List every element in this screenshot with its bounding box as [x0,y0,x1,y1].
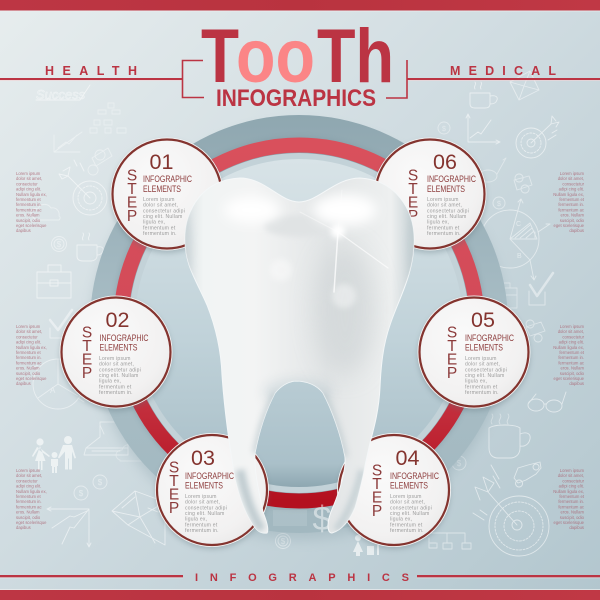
body text: fermentum et [427,225,460,231]
side text: left middle: eget scelerisque [16,376,47,381]
doodle: percent tag right [514,174,532,193]
side text: right middle: fermentum et [559,350,585,355]
vertical label: E [408,194,418,212]
step 04: INFOGRAPHIC [390,471,439,481]
vertical label: E [127,194,137,212]
doodle: cloud left [31,204,60,220]
side text: left bottom: eros. Nullam [16,510,40,515]
header rule right [407,78,600,81]
vertical label: T [82,338,92,355]
doodle: percent tag [88,148,112,175]
tooth [180,178,421,533]
step 02: 02 [106,308,129,332]
vertical label: S [372,462,382,480]
vertical label: E [447,352,457,368]
step 03: 03 [191,446,215,470]
side text: left bottom [16,468,47,530]
doodle: steam lines [491,414,509,424]
side text: right bottom: Lorem ipsum [560,468,585,473]
body text: fermentum et [465,384,498,390]
side text: left top: Nullam ligula ex, [16,192,47,197]
vertical label: T [372,476,382,493]
doodle: cup bottom right [489,425,530,458]
doodle: arrow chart right top [466,114,500,144]
body text: dolor sit amet, [99,362,134,368]
side text: right bottom: dapibus [569,525,584,530]
doodle: org chart right [429,533,471,549]
side text: left middle: adipi cing elit. [16,340,41,345]
title bracket [182,60,407,98]
doodle: small coin right top: $ [442,126,446,133]
step 02: INFOGRAPHIC [100,333,149,343]
side text: left bottom: dolor sit amet, [16,473,42,478]
side text: right middle: eget scelerisque [554,376,585,381]
side text: left top: eros. Nullam [16,213,40,218]
doodle: left top arrow chart [54,132,82,152]
doodle: briefcase [37,265,71,298]
vertical label: T [169,473,179,490]
doodle: diamond right [510,71,539,100]
side text: right bottom: adipi cing elit. [559,484,584,489]
doodle: target left [59,160,107,215]
vertical label: E [169,486,179,504]
body text: dolor sit amet, [465,362,500,368]
body text: Lorem ipsum [185,494,217,500]
doodle: org chart [90,103,126,133]
side text: left top: fermentum ac [16,207,42,212]
footer rule left [0,575,183,578]
doodle: cup right top [470,82,497,108]
vertical label: P [447,365,457,382]
doodle: coin right [493,197,505,209]
title: Th [317,14,394,99]
body text: Lorem ipsum [390,494,422,500]
side text: right bottom: fermentum et [559,494,585,499]
body text: consectetur adipi [143,208,185,214]
side text: right bottom: Nullam ligula ex, [553,489,584,494]
vertical label: S [447,324,457,342]
vertical label: S [127,168,137,184]
body text [143,197,185,237]
side text: left top: suscipit, odio [16,218,41,223]
side text: right bottom [553,468,585,530]
doodle: arrow chart bottom left [47,507,91,547]
doodle: coins left: $ [98,478,103,487]
side text: right top: consectetur [562,181,585,186]
body text: dolor sit amet, [427,203,462,209]
side text: right middle: Nullam ligula ex, [553,345,584,350]
body text: cing elit. Nullam [185,511,225,517]
side text: right top: fermentum et [559,197,585,202]
side text: right middle: fermentum in. [558,355,584,360]
title: oo [236,14,315,99]
vertical label [447,324,457,382]
side text: right middle: dolor sit amet, [558,329,584,334]
step 05: INFOGRAPHIC [465,333,514,343]
body text: ligula ex, [185,517,207,523]
body text: fermentum et [99,384,132,390]
doodle: dollar sign: $ [313,500,332,538]
doodles: background sketch icons [31,71,566,556]
doodle: folder right [492,283,517,308]
side text: right middle: adipi cing elit. [559,340,584,345]
side text: left top [16,171,47,233]
step 06: INFOGRAPHIC [427,174,476,184]
step 04: 04 [396,446,419,470]
doodle: car [514,462,541,487]
tooth shading [180,200,421,530]
side text: right middle: fermentum ac [558,360,584,365]
step 03: ELEMENTS [185,480,223,490]
body text: Lorem ipsum [465,356,497,362]
side text: right bottom: dolor sit amet, [558,473,584,478]
step 05: ELEMENTS [465,342,503,352]
vertical label [127,168,137,225]
doodle: coin left: $ [57,240,62,249]
step 03: INFOGRAPHIC [185,471,234,481]
side text: left middle: fermentum et [16,350,42,355]
step 04 [337,433,451,549]
doodle: diamond [112,491,165,545]
side text: right top: fermentum ac [558,207,584,212]
body text: cing elit. Nullam [390,511,430,517]
subtitle: INFOGRAPHICS [216,85,376,112]
side text: right bottom: eget scelerisque [554,520,585,525]
side text: right top: dolor sit amet, [558,176,584,181]
side text: right top: Lorem ipsum [560,171,585,176]
step 06 [374,138,486,253]
vertical label: T [408,181,418,198]
central rings [90,115,508,540]
side text: right bottom: fermentum in. [558,499,584,504]
doodle: wallet [273,510,307,526]
step 02 [60,296,172,411]
side text: right top: adipi cing elit. [559,187,584,192]
vertical label [372,462,382,520]
vertical label [408,168,418,225]
body text: Lorem ipsum [143,197,175,203]
step 01 [110,138,224,253]
doodle: glasses top right [479,158,506,182]
doodle: check mark right [529,273,553,305]
side text: left middle: dapibus [16,381,31,386]
doodle: percent tag lower right [526,320,545,342]
doodle: check mark box [50,310,72,338]
doodle: coins left: $ [79,489,84,498]
side text: right top: Nullam ligula ex, [553,192,584,197]
body text: consectetur adipi [465,367,507,373]
body text: cing elit. Nullam [427,214,467,220]
doodle: target right [516,116,559,158]
label: health: HEALTH [45,64,137,78]
body text [390,494,432,534]
step 05 [418,296,530,411]
step 06: ELEMENTS [427,184,465,194]
step 02: ELEMENTS [100,342,138,352]
label: medical: MEDICAL [450,64,556,78]
vertical label: S [82,324,92,342]
doodle: big target [473,465,549,556]
doodle: coin on disc right [452,456,466,470]
body text: fermentum in. [427,231,461,237]
vertical label [82,324,92,382]
body text [427,197,469,237]
header rule left [0,78,182,81]
side text: left middle: Nullam ligula ex, [16,345,47,350]
side text: left bottom: adipi cing elit. [16,484,41,489]
vertical label: T [127,181,137,198]
body text: fermentum in. [99,390,133,396]
body text: fermentum et [390,522,423,528]
body text: fermentum in. [143,231,177,237]
body text: fermentum in. [465,390,499,396]
title [201,14,394,99]
vertical label: S [408,168,418,184]
body text: dolor sit amet, [390,500,425,506]
footer label: INFOGRAPHICS [195,572,409,584]
vertical label: T [447,338,457,355]
body text: consectetur adipi [390,505,432,511]
title: T [201,14,239,99]
body text [99,356,141,396]
body text: fermentum et [185,522,218,528]
side text: right top: suscipit, odio [560,218,585,223]
step 01: INFOGRAPHIC [143,174,192,184]
side text: left top: eget scelerisque [16,223,47,228]
side text: right middle: suscipit, odio [560,371,585,376]
side text: left middle: eros. Nullam [16,366,40,371]
side text: right middle: eros. Nullam [560,366,584,371]
side text: left bottom: fermentum in. [16,499,42,504]
side text: right middle: Lorem ipsum [560,324,585,329]
body text [185,494,227,534]
side text: left top: dapibus [16,228,31,233]
step 05: 05 [471,308,495,332]
doodle: pie chart left: A [50,386,56,395]
doodle: coins left [74,475,107,500]
vertical label: P [169,500,179,517]
step 06: 06 [433,150,457,174]
side text: left bottom: Nullam ligula ex, [16,489,47,494]
vertical label: P [408,208,418,225]
body text: dolor sit amet, [185,500,220,506]
body text: consectetur adipi [427,208,469,214]
body text: Lorem ipsum [99,356,131,362]
sparkle [300,190,388,292]
doodle: coin on disc right: $ [457,459,462,468]
body text: fermentum et [143,225,176,231]
tooth highlights [224,194,377,308]
side text: left bottom: consectetur [16,478,38,483]
doodles on the lower ring [273,500,332,538]
body text: consectetur adipi [185,505,227,511]
doodle: pie chart right [481,199,550,280]
doodle: coin right: $ [497,201,501,208]
vertical label: P [372,503,382,520]
doodle: glasses [528,392,566,412]
side text: left bottom: Lorem ipsum [16,468,41,473]
side text: left middle [16,324,47,386]
side text: left bottom: eget scelerisque [16,520,47,525]
vertical label: P [127,208,137,225]
body text: ligula ex, [99,379,121,385]
side text: left middle: fermentum ac [16,360,42,365]
side text: left bottom: suscipit, odio [16,515,41,520]
doodle: pie chart right: B [517,253,522,260]
bottom bar [0,589,600,600]
side text: right bottom: eros. Nullam [560,510,584,515]
side text: left bottom: fermentum ac [16,504,42,509]
body text [465,356,507,396]
body text: dolor sit amet, [143,203,178,209]
body text: ligula ex, [143,220,165,226]
body text: fermentum in. [185,528,219,534]
icon: family silhouette left [32,436,76,473]
doodle: small coin right top [438,122,450,134]
side text: right middle [553,324,585,386]
side text: left middle: suscipit, odio [16,371,41,376]
doodle: pie chart right: C [516,221,521,228]
side text: left top: Lorem ipsum [16,171,41,176]
doodle: laptop [84,422,128,455]
step 03 [155,433,269,549]
side text: right top: fermentum in. [558,202,584,207]
side text: right middle: dapibus [569,381,584,386]
side text: right bottom: fermentum ac [558,504,584,509]
doodle: coin bottom [276,534,290,548]
vertical label [169,460,179,517]
step 04: ELEMENTS [390,480,428,490]
body text: cing elit. Nullam [143,214,183,220]
vertical label: S [169,460,179,476]
side text: left top: consectetur [16,181,38,186]
icon: family silhouette center [353,535,379,556]
body text: ligula ex, [390,517,412,523]
side text: right top: dapibus [569,228,584,233]
side text: left middle: Lorem ipsum [16,324,41,329]
side text: right top [553,171,585,233]
doodle: coin left [52,236,66,252]
doodle: coffee cup left [77,233,103,261]
vertical label: E [82,352,92,368]
doodle: cloud on disc [116,444,149,461]
body text: cing elit. Nullam [99,373,139,379]
side text: right top: eros. Nullam [560,213,584,218]
doodle: pie chart left [32,359,84,409]
footer rule right [417,575,600,578]
body text: fermentum in. [390,528,424,534]
side text: left top: fermentum et [16,197,42,202]
side text: left middle: fermentum in. [16,355,42,360]
body text: consectetur adipi [99,367,141,373]
body text: ligula ex, [427,220,449,226]
body text: cing elit. Nullam [465,373,505,379]
body text: ligula ex, [465,379,487,385]
doodle: coin bottom: $ [281,537,286,546]
side text: right bottom: suscipit, odio [560,515,585,520]
side text: left top: dolor sit amet, [16,176,42,181]
top bar [0,0,600,12]
side text: left top: fermentum in. [16,202,42,207]
body text: Lorem ipsum [427,197,459,203]
side text: left bottom: fermentum et [16,494,42,499]
step 01: ELEMENTS [143,184,181,194]
side text: left middle: consectetur [16,334,38,339]
vertical label: P [82,365,92,382]
side text: left top: adipi cing elit. [16,187,41,192]
side text: left bottom: dapibus [16,525,31,530]
side text: right middle: consectetur [562,334,585,339]
vertical label: E [372,490,382,506]
doodle: success scribble: Success [36,87,86,102]
side text: right bottom: consectetur [562,478,585,483]
step 01: 01 [150,150,173,174]
side text: right top: eget scelerisque [554,223,585,228]
side text: left middle: dolor sit amet, [16,329,42,334]
